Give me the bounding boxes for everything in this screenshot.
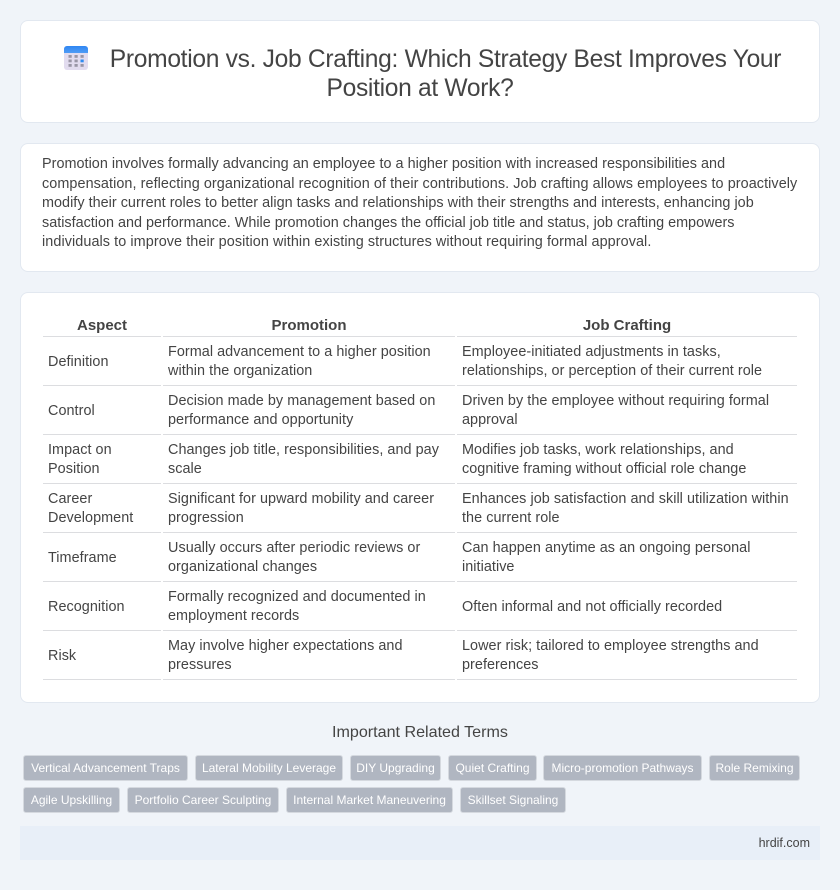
footer bar xyxy=(20,826,820,860)
row: recognition: Recognition xyxy=(48,598,125,614)
row: impact on position: scale xyxy=(168,461,202,477)
intro paragraph: modify their current roles to better align tasks and relationships with their strengths and interests, enhancing job xyxy=(42,195,754,211)
row: control: approval xyxy=(462,412,518,428)
row: impact on position: cognitive framing without official role change xyxy=(462,461,746,477)
row: impact on position: Modifies job tasks, work relationships, and xyxy=(462,442,734,458)
row: career development: Development xyxy=(48,510,133,526)
row: control xyxy=(48,393,769,428)
row: impact on position: Position xyxy=(48,461,100,477)
row: control: Decision made by management based on xyxy=(168,393,435,409)
tag: Lateral Mobility Leverage xyxy=(202,761,336,775)
intro text card xyxy=(20,143,820,272)
tag: Role Remixing xyxy=(715,761,794,775)
row: risk xyxy=(48,638,759,673)
related term tags xyxy=(23,755,800,813)
row: risk: preferences xyxy=(462,657,539,673)
table card xyxy=(20,292,820,703)
row: timeframe: Usually occurs after periodic reviews or xyxy=(168,540,420,556)
row: risk: pressures xyxy=(168,657,232,673)
icon: calendar xyxy=(64,46,88,70)
row: career development: the current role xyxy=(462,510,560,526)
tag xyxy=(709,755,800,781)
row: control: performance and opportunity xyxy=(168,412,353,428)
intro paragraph: Promotion involves formally advancing an employee to a higher position with increased responsibilities and xyxy=(42,156,725,172)
tag: Vertical Advancement Traps xyxy=(31,761,180,775)
row: impact on position: Changes job title, responsibilities, and pay xyxy=(168,442,439,458)
row: recognition: Formally recognized and documented in xyxy=(168,589,426,605)
row: recognition xyxy=(48,589,722,624)
row: definition: Definition xyxy=(48,354,108,370)
header: aspect: Aspect xyxy=(77,317,127,334)
footer site name: hrdif.com xyxy=(759,836,810,850)
row: control: Control xyxy=(48,402,95,418)
tag xyxy=(350,755,441,781)
row: timeframe: initiative xyxy=(462,559,514,575)
tag: DIY Upgrading xyxy=(356,761,435,775)
intro paragraph: individuals to improve their position within existing structures without requiring formal approval. xyxy=(42,234,651,250)
row: risk: Lower risk; tailored to employee strengths and xyxy=(462,638,759,654)
title: Promotion vs. Job Crafting: Which Strategy Best Improves Your xyxy=(110,46,781,73)
tag xyxy=(23,755,188,781)
header: job crafting: Job Crafting xyxy=(583,317,671,334)
row: recognition: employment records xyxy=(168,608,299,624)
intro paragraph: satisfaction and performance. While promotion changes the official job title and status, job crafting empowers xyxy=(42,214,734,230)
row: definition xyxy=(48,344,762,379)
row: timeframe xyxy=(48,540,750,575)
tag: Quiet Crafting xyxy=(455,761,530,775)
tag xyxy=(448,755,537,781)
tag: Portfolio Career Sculpting xyxy=(135,793,271,807)
tag xyxy=(127,787,279,813)
tag xyxy=(195,755,343,781)
row: definition: relationships, or perception of their current role xyxy=(462,363,762,379)
row: definition: Formal advancement to a higher position xyxy=(168,344,431,360)
row: timeframe: organizational changes xyxy=(168,559,317,575)
tag xyxy=(23,787,120,813)
header card xyxy=(20,20,820,123)
tag xyxy=(286,787,453,813)
row: timeframe: Can happen anytime as an ongoing personal xyxy=(462,540,750,556)
title: Position at Work? xyxy=(326,75,514,102)
row: career development: Career xyxy=(48,491,92,507)
tag: Internal Market Maneuvering xyxy=(293,793,446,807)
tag: Micro-promotion Pathways xyxy=(551,761,694,775)
row: impact on position xyxy=(48,442,746,477)
row: career development xyxy=(48,491,789,526)
header: promotion: Promotion xyxy=(272,317,346,334)
row: recognition: Often informal and not officially recorded xyxy=(462,598,722,614)
row: risk: Risk xyxy=(48,648,76,664)
tag xyxy=(460,787,566,813)
intro paragraph: compensation, reflecting organizational recognition of their contributions. Job crafting allows employees to proactively xyxy=(42,176,797,192)
row: definition: Employee-initiated adjustments in tasks, xyxy=(462,344,721,360)
row: career development: Enhances job satisfaction and skill utilization within xyxy=(462,491,789,507)
row: definition: within the organization xyxy=(168,363,312,379)
intro paragraph xyxy=(42,156,798,250)
row: career development: Significant for upward mobility and career xyxy=(168,491,434,507)
tag: Agile Upskilling xyxy=(31,793,112,807)
tag xyxy=(543,755,702,781)
row: control: Driven by the employee without requiring formal xyxy=(462,393,769,409)
comparison table xyxy=(43,317,797,680)
row: career development: progression xyxy=(168,510,244,526)
related terms heading: Important Related Terms xyxy=(332,723,508,741)
row: risk: May involve higher expectations and xyxy=(168,638,403,654)
tag: Skillset Signaling xyxy=(468,793,558,807)
title xyxy=(110,46,782,102)
row: timeframe: Timeframe xyxy=(48,550,117,566)
row: impact on position: Impact on xyxy=(48,442,112,458)
